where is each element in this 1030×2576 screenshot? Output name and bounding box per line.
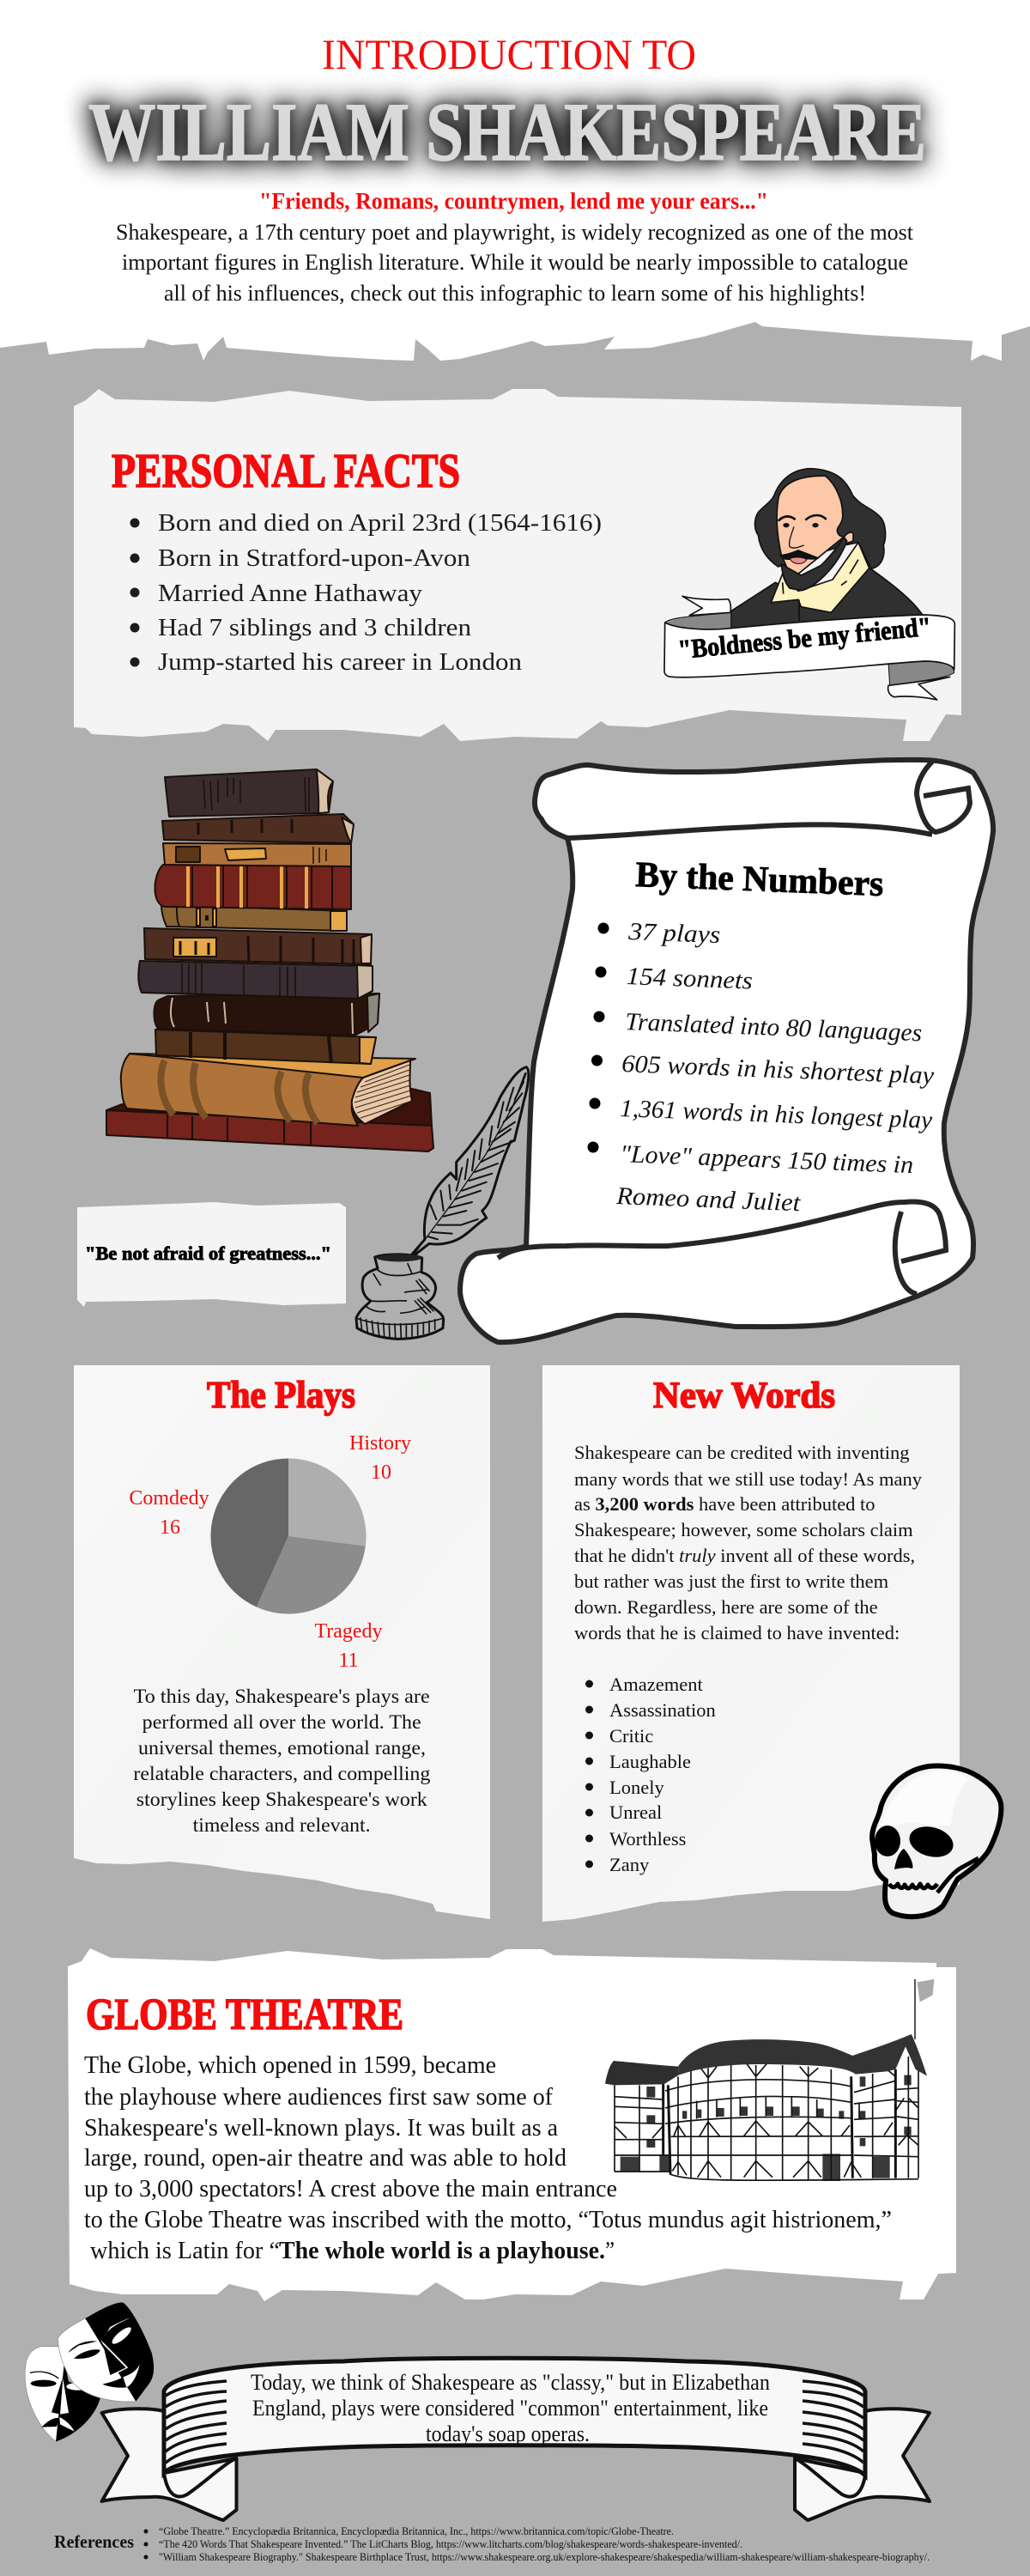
paragraph: new words: Shakespeare; however, some scholars claim — [574, 1519, 913, 1540]
bullet list: invented words: Lonely — [609, 1777, 664, 1798]
bullet list: facts: Born and died on April 23rd (1564-1616) — [158, 509, 602, 537]
paragraph: plays — [133, 1686, 431, 1837]
bullet list: invented words: Assassination — [609, 1699, 716, 1721]
paragraph: new words: but rather was just the first to write them — [574, 1571, 889, 1592]
paragraph: new words: many words that we still use today! As many — [574, 1468, 923, 1490]
paragraph: globe: the playhouse where audiences first saw some of — [84, 2083, 553, 2111]
references — [54, 2524, 930, 2563]
icon: Shakespeare portrait with banner — [664, 469, 954, 700]
list: numbers: "Love" appears 150 times in — [620, 1140, 914, 1179]
panel: new words — [542, 1365, 1001, 1922]
references: “The 420 Words That Shakespeare Invented.” The LitCharts Blog, https://www.litcharts.com/blog/shakespeare/words-shakespeare-invented/. — [159, 2537, 742, 2550]
heading: globe theatre: GLOBE THEATRE — [86, 1990, 403, 2039]
intro paragraph: Shakespeare, a 17th century poet and playwright, is widely recognized as one of the most — [116, 220, 914, 245]
pie chart: plays by genre — [129, 1432, 411, 1672]
bullet list: invented words: Zany — [609, 1854, 650, 1875]
bullet list: facts: Had 7 siblings and 3 children — [158, 614, 472, 641]
paragraph: globe: which is Latin for “ — [90, 2237, 280, 2264]
list: numbers — [587, 918, 935, 1217]
bullet list: invented words: Worthless — [609, 1828, 686, 1850]
banner text — [251, 2370, 770, 2446]
banner text: today's soap operas. — [426, 2421, 590, 2446]
paragraph: new words: words that he is claimed to have invented: — [574, 1622, 900, 1643]
references: “Globe Theatre.” Encyclopædia Britannica, Encyclopædia Britannica, Inc., https://www.britannica.com/topic/Globe-Theatre. — [159, 2524, 674, 2537]
heading: personal facts: PERSONAL FACTS — [112, 445, 460, 498]
bullet list: invented words: Critic — [609, 1725, 653, 1747]
paragraph: globe: up to 3,000 spectators! A crest above the main entrance — [84, 2175, 617, 2202]
quote panel: be not afraid: "Be not afraid of greatness..." — [85, 1242, 331, 1264]
paragraph: globe: to the Globe Theatre was inscribed with the motto, “Totus mundus agit histrionem,” — [84, 2206, 892, 2233]
paragraph: globe: The Globe, which opened in 1599, became — [84, 2051, 496, 2079]
paragraph: plays: storylines keep Shakespeare's work — [136, 1789, 427, 1811]
quote: Friends, Romans: "Friends, Romans, countrymen, lend me your ears..." — [259, 188, 768, 214]
intro paragraph: important figures in English literature. While it would be nearly impossible to catalogue — [122, 250, 908, 275]
bullet list: facts: Born in Stratford-upon-Avon — [158, 544, 471, 572]
bullet list: invented words: Unreal — [609, 1801, 662, 1823]
references: "William Shakespeare Biography." Shakespeare Birthplace Trust, https://www.shakespeare.org.uk/explore-shakespeare/shakespedia/william-shakespeare/william-shakespeare-biography/. — [159, 2550, 930, 2563]
list: numbers: Romeo and Juliet — [615, 1182, 802, 1217]
panel: by the numbers scroll — [460, 760, 993, 1342]
list: numbers: 605 words in his shortest play — [621, 1050, 935, 1090]
paragraph: new words: that he didn't truly invent all of these words, — [574, 1545, 915, 1566]
paragraph: plays: performed all over the world. The — [142, 1711, 421, 1734]
paragraph: globe: Shakespeare's well-known plays. It was built as a — [84, 2114, 558, 2142]
paragraph: globe: large, round, open-air theatre and was able to hold — [84, 2144, 566, 2172]
bullet list: facts — [130, 509, 602, 676]
paragraph: new words — [574, 1442, 923, 1643]
pie chart: plays by genre: Comdedy — [129, 1487, 209, 1510]
list: numbers: 1,361 words in his longest play — [620, 1095, 933, 1134]
icon: globe theatre building — [605, 1979, 934, 2181]
heading: by the numbers: By the Numbers — [635, 855, 884, 904]
paragraph: plays: To this day, Shakespeare's plays are — [134, 1686, 430, 1708]
list: numbers: Translated into 80 languages — [625, 1008, 923, 1047]
paragraph: plays: relatable characters, and compelling — [133, 1763, 431, 1785]
paragraph: globe — [84, 2051, 892, 2264]
bullet list: invented words: Laughable — [609, 1751, 691, 1772]
panel: globe theatre — [68, 1948, 956, 2301]
pie chart: plays by genre: 10 — [371, 1461, 391, 1484]
panel: personal facts — [74, 389, 961, 741]
icon: stack of books — [106, 769, 433, 1151]
title: Introduction to: INTRODUCTION TO — [322, 30, 696, 78]
paragraph: new words: down. Regardless, here are some of the — [574, 1596, 878, 1618]
paragraph: globe: ” — [605, 2237, 615, 2264]
paragraph: plays: universal themes, emotional range, — [138, 1737, 426, 1759]
pie chart: plays by genre: Tragedy — [314, 1620, 383, 1643]
quote: boldness be my friend: "Boldness be my friend" — [676, 611, 932, 665]
pie chart: plays by genre: 16 — [160, 1516, 180, 1539]
heading: the plays: The Plays — [207, 1374, 355, 1416]
intro paragraph: all of his influences, check out this infographic to learn some of his highlights! — [164, 281, 866, 306]
list: numbers: 37 plays — [627, 918, 721, 949]
heading: new words: New Words — [653, 1376, 835, 1416]
pie chart: plays by genre: 11 — [338, 1649, 359, 1672]
quote panel: be not afraid — [77, 1202, 346, 1307]
pie chart: plays by genre: History — [349, 1432, 411, 1455]
references: References — [54, 2531, 134, 2552]
icon: skull — [872, 1766, 1001, 1917]
intro paragraph — [116, 220, 914, 306]
bullet list: invented words — [585, 1674, 716, 1875]
banner text: Today, we think of Shakespeare as "classy," but in Elizabethan — [251, 2370, 770, 2395]
paragraph: new words: as 3,200 words have been attributed to — [574, 1493, 876, 1515]
icon: comedy and tragedy masks — [25, 2302, 154, 2441]
paragraph: globe: The whole world is a playhouse. — [279, 2237, 605, 2264]
bullet list: facts: Married Anne Hathaway — [158, 580, 423, 607]
panel: the plays — [74, 1365, 490, 1919]
paragraph: plays: timeless and relevant. — [193, 1814, 371, 1837]
list: numbers: 154 sonnets — [626, 963, 753, 995]
bullet list: invented words: Amazement — [609, 1674, 703, 1695]
paragraph: new words: Shakespeare can be credited with inventing — [574, 1442, 909, 1463]
banner: classy vs common — [102, 2358, 930, 2520]
banner text: England, plays were considered "common" entertainment, like — [252, 2396, 768, 2421]
icon: quill and inkwell — [356, 1067, 529, 1339]
bullet list: facts: Jump-started his career in London — [158, 648, 523, 676]
